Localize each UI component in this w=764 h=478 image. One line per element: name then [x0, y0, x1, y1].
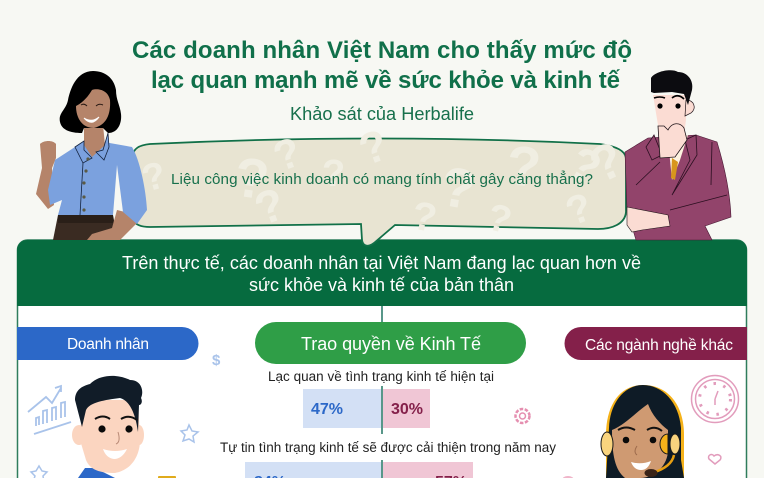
illustration: call-centre woman [601, 385, 684, 478]
header text: Trên thực tế, các doanh nhân tại Việt Nam đang lạc quan hơn về [122, 253, 641, 273]
pill: Trao quyền về Kinh Tế [255, 322, 526, 364]
title: Các doanh nhân Việt Nam cho thấy mức độ [132, 37, 632, 64]
subtitle: Khảo sát của Herbalife [290, 104, 474, 124]
speech bubble [133, 120, 632, 246]
illustration: smiling woman [36, 71, 147, 240]
question mark pattern: ? [581, 130, 632, 194]
stat 2 bars [245, 460, 473, 478]
pill: Các ngành nghề khác: Các ngành nghề khác [585, 337, 733, 354]
question mark pattern: ? [560, 185, 598, 234]
icon: clock [692, 376, 738, 422]
icon: gold coin [158, 476, 176, 478]
main panel [17, 240, 747, 478]
icon: dollar: $ [212, 352, 221, 369]
illustration: thinking man [625, 70, 731, 240]
header text: sức khỏe và kinh tế của bản thân [249, 275, 514, 295]
title: lạc quan mạnh mẽ về sức khỏe và kinh tế [151, 67, 621, 94]
question mark pattern: ? [436, 154, 481, 222]
question mark pattern: ? [504, 133, 544, 199]
question mark pattern: ? [230, 144, 273, 212]
title [132, 37, 632, 94]
center divider [381, 306, 383, 323]
stat 1 label: Lạc quan về tình trạng kinh tế hiện tại [268, 369, 494, 384]
icon: growth chart [28, 386, 71, 434]
icon: star right [181, 425, 198, 442]
stat 2 label: Tự tin tình trạng kinh tế sẽ được cải thiện trong năm nay [220, 440, 556, 455]
question mark pattern: ? [353, 120, 395, 175]
question mark pattern: ? [137, 154, 171, 201]
question mark pattern: ? [267, 128, 307, 180]
stat 1 bars [303, 386, 430, 434]
pill: Các ngành nghề khác [565, 327, 747, 360]
pill: Doanh nhân [17, 327, 198, 360]
header text [122, 253, 641, 295]
icon: pink accent [562, 476, 574, 478]
question mark pattern: ? [322, 153, 345, 195]
icon: star bottom [31, 466, 47, 478]
question mark pattern: ? [408, 194, 440, 241]
pill: Trao quyền về Kinh Tế: Trao quyền về Kinh Tế [301, 334, 481, 354]
pill: Doanh nhân: Doanh nhân [67, 336, 149, 353]
stat 1 bars: 47% [311, 401, 343, 418]
stat 1 bars: 30% [391, 401, 423, 418]
question mark pattern [137, 120, 632, 243]
icon: heart [709, 455, 721, 464]
question mark pattern: ? [483, 196, 516, 243]
question mark pattern: ? [560, 136, 610, 195]
icon: gear [516, 409, 530, 423]
panel header [17, 240, 747, 306]
question mark pattern: ? [248, 177, 292, 235]
illustration: businessman [72, 376, 144, 478]
bubble question: Liệu công việc kinh doanh có mang tính chất gây căng thẳng? [171, 170, 593, 188]
